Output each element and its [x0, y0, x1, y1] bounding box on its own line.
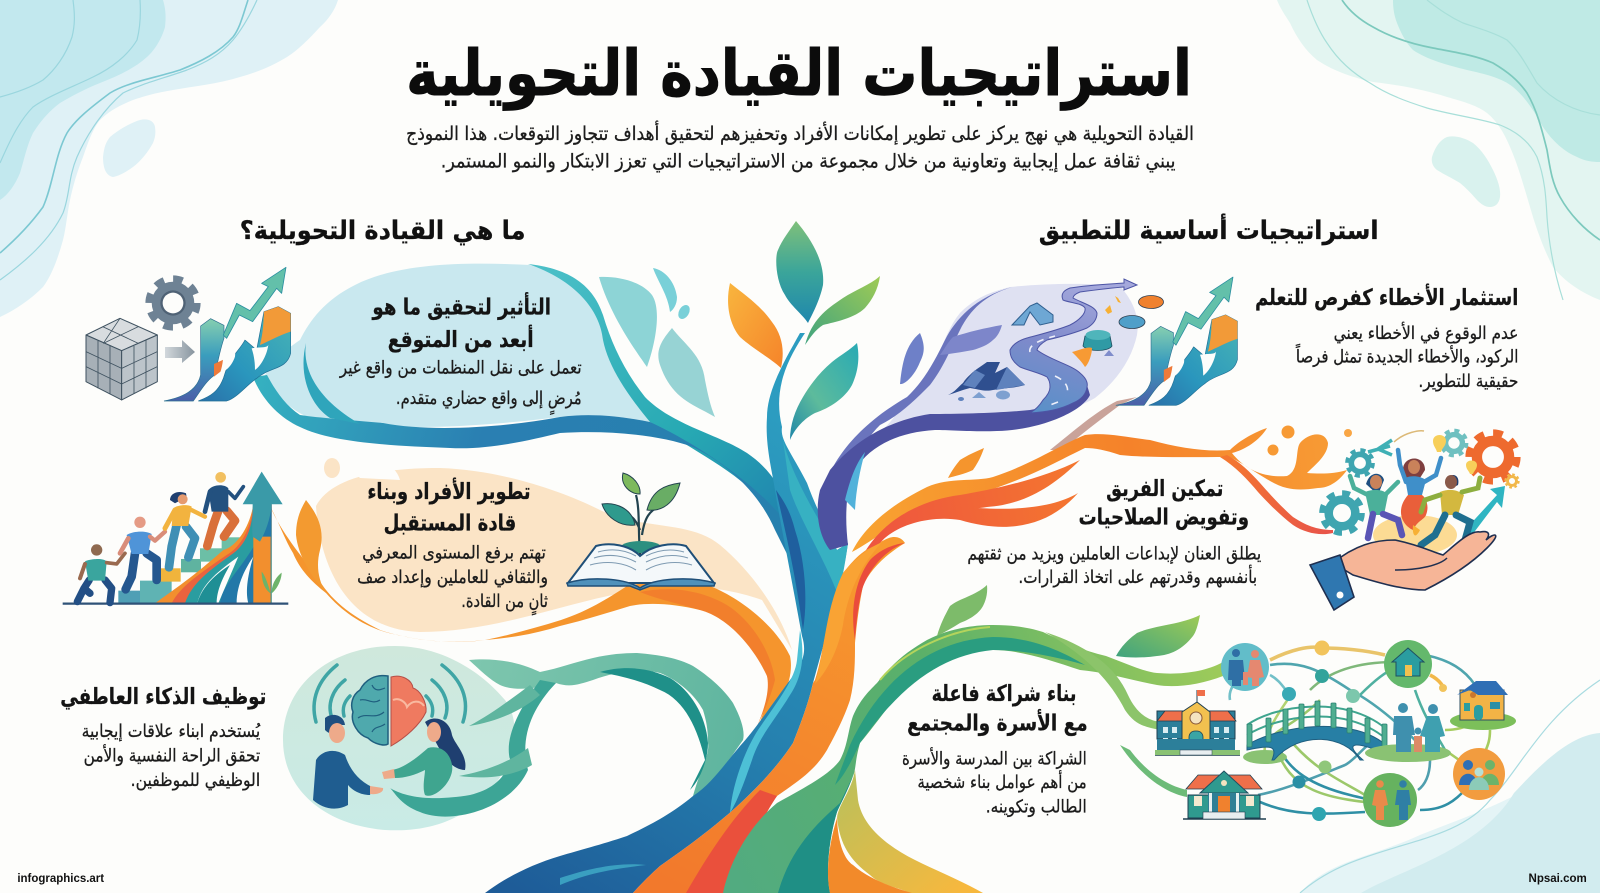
dancer 1: [1350, 474, 1402, 538]
climber 3: [165, 492, 205, 567]
panel: develop people text: ثانٍ من القادة.: [461, 591, 548, 616]
panel: partnership text: الشراكة بين المدرسة والأسرة: [902, 747, 1087, 769]
mountains: [948, 362, 1025, 395]
panel: develop people text: قادة المستقبل: [384, 511, 516, 537]
cuff: [1310, 555, 1354, 610]
steps: [118, 537, 242, 603]
icon: civic building: [1183, 771, 1266, 819]
tree: central trunk: [485, 333, 848, 893]
bulbs: [1433, 435, 1446, 452]
climber 4: [205, 472, 243, 546]
background: top-right wave: [1277, 0, 1600, 300]
panel: empowerment text: بأنفسهم وقدرتهم على اتخاذ القرارات.: [1018, 565, 1257, 588]
panel: influence text: التأثير لتحقيق ما هو: [372, 291, 551, 320]
bubble: panel 2 background: [316, 456, 792, 650]
winding road: [1010, 279, 1137, 413]
panel: partnership text: مع الأسرة والمجتمع: [907, 709, 1088, 737]
tree: purple branch and journey bubble: [818, 284, 1138, 550]
panel: develop people text: والثقافي للعاملين وإعداد صف: [357, 567, 548, 588]
node: house green: [1384, 640, 1432, 688]
icon: cube, gear and growth chart: [86, 280, 196, 400]
diagram: community network: [1155, 640, 1516, 827]
intro paragraph: يبني ثقافة عمل إيجابية وتعاونية من خلال مجموعة من الاستراتيجيات التي تعزز الابتكار والنمو المستمر.: [441, 149, 1176, 173]
brain: [352, 676, 388, 745]
dancer 3: [1421, 475, 1480, 545]
climber 2: [120, 517, 165, 589]
panel: mistakes text: [1255, 283, 1518, 392]
glow: [1373, 515, 1457, 555]
panel: empowerment text: يطلق العنان لإبداعات العاملين ويزيد من ثقتهم: [967, 543, 1261, 564]
panel: partnership text: من أهم عوامل بناء شخصية: [917, 770, 1087, 793]
panel: mistakes text: عدم الوقوع في الأخطاء يعني: [1334, 322, 1518, 344]
icon: hand lifting empowered team: [1310, 431, 1518, 610]
icon: school: [1155, 690, 1240, 755]
heading: strategies: استراتيجيات أساسية للتطبيق: [1039, 213, 1379, 246]
icon: open book with seedling: [567, 473, 715, 590]
intro paragraph: القيادة التحويلية هي نهج يركز على تطوير إمكانات الأفراد وتحفيزهم لتحقيق أهداف تتجاوز التوقعات. هذا النموذج: [406, 121, 1194, 146]
panel: mistakes text: استثمار الأخطاء كفرص للتعلم: [1255, 283, 1518, 311]
intro paragraph: [406, 121, 1194, 173]
tree: green right branch: [723, 585, 1223, 893]
background: top-left wave: [0, 0, 338, 317]
icon: growth chart right: [1116, 277, 1237, 405]
tree: left upper branch: [528, 264, 797, 540]
woman: [382, 718, 465, 796]
gears: [1323, 494, 1361, 532]
icon: transform arrow: [165, 340, 195, 363]
panel: emotional intelligence text: [60, 684, 266, 791]
panel: emotional intelligence text: الوظيفي للموظفين.: [131, 770, 260, 791]
node: couple with child: [1221, 643, 1269, 691]
sound waves: [314, 665, 465, 722]
heading: what is it: ما هي القيادة التحويلية؟: [240, 216, 526, 246]
rising ribbons: [155, 504, 272, 603]
sprig: [262, 572, 282, 593]
icon: gear: [150, 280, 196, 326]
tree: faint link to chart: [1050, 397, 1137, 450]
icon: arch bridge: [1243, 701, 1388, 764]
panel: influence text: مُرضٍ إلى واقع حضاري متقدم.: [396, 388, 582, 415]
tree: orange right branch: [633, 426, 1352, 893]
panel: partnership text: بناء شراكة فاعلة: [932, 681, 1077, 707]
network nodes: [1282, 640, 1447, 821]
man: [313, 715, 383, 809]
icon: family on grass: [1365, 703, 1451, 762]
node: group orange: [1453, 748, 1505, 800]
panel: empowerment text: تمكين الفريق: [1106, 476, 1223, 502]
seedling: [602, 473, 680, 555]
heart: [391, 676, 426, 746]
panel: develop people text: تهتم برفع المستوى المعرفي: [362, 542, 546, 563]
ground line: [63, 600, 288, 607]
panel: emotional intelligence text: يُستخدم ابناء علاقات إيجابية: [82, 721, 260, 742]
background: bottom-right wave: [1300, 680, 1600, 893]
panel: partnership text: [902, 681, 1088, 817]
icon: stone cube: [86, 318, 157, 400]
footer credit left: infographics.art: [17, 872, 104, 885]
node: couple green: [1363, 773, 1417, 827]
stepping stones: [1138, 296, 1164, 308]
panel: mistakes text: الركود، والأخطاء الجديدة تمثل فرصاً: [1295, 343, 1518, 367]
bubble: panel 3 background: [283, 646, 514, 830]
climber 1: [77, 544, 125, 603]
icon: village house: [1450, 681, 1516, 730]
title: استراتيجيات القيادة التحويلية: [406, 36, 1192, 111]
panel: develop people text: تطوير الأفراد وبناء: [367, 477, 531, 505]
arrow: [1465, 486, 1505, 535]
footer credit right: Npsai.com: [1529, 872, 1587, 885]
panel: emotional intelligence text: توظيف الذكاء العاطفي: [60, 684, 266, 710]
panel: empowerment text: [967, 476, 1261, 588]
panel: develop people text: [357, 477, 548, 616]
tree: orange branch to panel 2: [270, 500, 791, 740]
panel: empowerment text: وتفويض الصلاحيات: [1079, 505, 1249, 531]
icon: winding road journey: [948, 279, 1164, 413]
hand: [1333, 532, 1496, 590]
panel: influence text: تعمل على نقل المنظمات من واقع غير: [339, 358, 582, 379]
icon: brain and heart with two people: [313, 665, 465, 809]
tree: top leaves: [728, 221, 880, 440]
panel: partnership text: الطالب وتكوينه.: [986, 796, 1087, 817]
panel: influence text: أبعد من المتوقع: [388, 324, 534, 353]
icon: climbing team with arrow: [63, 472, 288, 604]
tree: teal branch to panel 3: [390, 653, 744, 817]
book: [568, 544, 714, 583]
network links: [1230, 647, 1490, 814]
panel: influence text: [339, 291, 582, 415]
panel: mistakes text: حقيقية للتطوير.: [1418, 371, 1518, 392]
icon: growth chart left: [164, 267, 291, 401]
panel: emotional intelligence text: تحقق الراحة النفسية والأمن: [84, 744, 260, 766]
tree: small floating leaves: [599, 268, 715, 417]
tree: left lower branch: [253, 343, 805, 590]
dancer 2: [1398, 450, 1441, 535]
bubble: panel 1 background: [265, 264, 650, 427]
